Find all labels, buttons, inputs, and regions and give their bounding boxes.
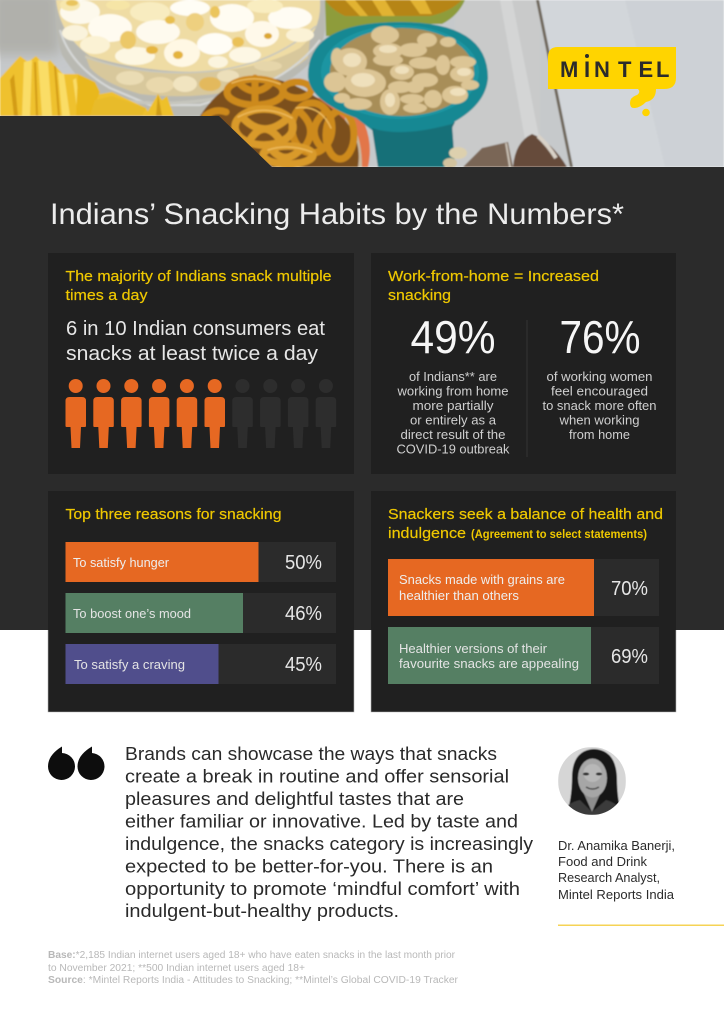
footnote: base and source: [48, 950, 459, 986]
title: Indians’ Snacking Habits by the Numbers*: [50, 198, 624, 231]
heading: work-from-home: snacking: [388, 287, 451, 304]
stat: 76%: to snack more often: [542, 399, 657, 413]
quote text: pleasures and delightful tastes that are: [125, 788, 464, 809]
bar: craving 45%: 45%: [285, 654, 322, 676]
icon: quotation marks: [48, 746, 104, 780]
quote text: either familiar or innovative. Led by taste and: [125, 810, 518, 832]
stat: 49%: working from home: [396, 384, 509, 398]
stat: 76%: when working: [558, 414, 640, 428]
accent line: [558, 924, 724, 926]
bar: hunger 50%: To satisfy hunger: [73, 556, 169, 570]
statement: 6 in 10: snacks at least twice a day: [66, 342, 319, 365]
heading: majority snack multiple times: The majority of Indians snack multiple: [66, 268, 332, 285]
bar: hunger 50%: 50%: [285, 552, 322, 574]
panel: snacking frequency: [48, 253, 354, 474]
heading: work-from-home: Work-from-home = Increased: [388, 268, 599, 285]
bar: craving 45%: To satisfy a craving: [74, 658, 185, 672]
logo: Mintel speech blob: [548, 47, 676, 116]
footnote: base and source: to November 2021; **500 Indian internet users aged 18+: [48, 963, 305, 974]
chips: [0, 56, 150, 116]
stat: 76%: of working women: [546, 370, 653, 384]
footnote: base and source: Source: *Mintel Reports India - Attitudes to Snacking; **Mintel’s Global COVID-19 Tracker: [48, 975, 459, 986]
quote text: expected to be better-for-you. There is an: [125, 856, 493, 876]
stat: 49%: 49%: [410, 311, 496, 363]
bar: mood 46%: 46%: [285, 603, 322, 625]
stat: 49%: [396, 311, 510, 456]
quote text: indulgent-but-healthy products.: [125, 900, 399, 921]
attribution: Food and Drink: [558, 854, 647, 869]
attribution: [558, 838, 675, 902]
logo: Mintel speech blob: MINTEL: [560, 57, 669, 82]
statement: 6 in 10: 6 in 10 Indian consumers eat: [66, 317, 325, 340]
stat: 49%: COVID-19 outbreak: [396, 442, 510, 456]
stat: 76%: [542, 311, 657, 442]
quote text: [125, 743, 534, 921]
heading: balance of health and indulgence: Snackers seek a balance of health and: [388, 506, 663, 523]
quote text: create a break in routine and offer sensorial: [125, 766, 509, 786]
stat: 76%: from home: [569, 428, 630, 442]
divider: [526, 320, 528, 457]
quote text: indulgence, the snacks category is increasingly: [125, 833, 534, 854]
stat: 76%: 76%: [560, 311, 640, 363]
green bowl: [325, 0, 465, 36]
bar: grains 70%: healthier than others: [399, 589, 519, 603]
bar: hunger 50%: [66, 542, 336, 582]
stat: 49%: or entirely as a: [410, 414, 496, 428]
portrait: Dr. Anamika Banerji: [558, 747, 626, 815]
quote text: Brands can showcase the ways that snacks: [125, 743, 497, 764]
heading: work-from-home: [388, 268, 599, 304]
bar: healthier versions 69%: 69%: [611, 646, 648, 668]
banner photo: bowls of snacks on a wooden table: [0, 0, 724, 168]
bar: craving 45%: [66, 644, 336, 684]
bar: mood 46%: [66, 593, 336, 633]
dark background band: [0, 116, 724, 630]
glass popcorn bowl: [55, 0, 325, 116]
bar: healthier versions 69%: [388, 627, 659, 684]
stat: 76%: feel encouraged: [551, 384, 648, 398]
bar: grains 70%: Snacks made with grains are: [399, 573, 565, 587]
statement: 6 in 10: [66, 317, 325, 365]
attribution: Dr. Anamika Banerji,: [558, 838, 675, 853]
bar: mood 46%: To boost one’s mood: [73, 607, 191, 621]
quote text: opportunity to promote ‘mindful comfort’ with: [125, 878, 520, 899]
bar: grains 70%: [388, 559, 659, 616]
bar: healthier versions 69%: favourite snacks are appealing: [399, 657, 579, 671]
attribution: Mintel Reports India: [558, 887, 675, 902]
panel: health and indulgence: [371, 491, 676, 712]
heading: majority snack multiple times: [66, 268, 332, 304]
stat: 49%: direct result of the: [400, 428, 506, 442]
heading: balance of health and indulgence: (Agreement to select statements): [471, 529, 647, 541]
footnote: base and source: Base:*2,185 Indian internet users aged 18+ who have eaten snacks in the last month prior: [48, 950, 456, 961]
orange bowl and pretzels: [316, 97, 371, 167]
panel: work from home: [371, 253, 676, 474]
teal bowl and peanuts: [450, 121, 456, 128]
pictogram: 6 of 10 people highlighted: [66, 379, 336, 448]
stat: 49%: more partially: [412, 399, 494, 413]
attribution: Research Analyst,: [558, 870, 660, 885]
heading: balance of health and indulgence: indulgence: [388, 525, 466, 542]
heading: majority snack multiple times: times a day: [66, 287, 148, 304]
chocolate and nuts on table: [463, 142, 513, 167]
panel: top three reasons: [48, 491, 354, 712]
stat: 49%: of Indians** are: [409, 370, 497, 384]
bar: grains 70%: 70%: [611, 578, 648, 600]
heading: balance of health and indulgence: [388, 506, 663, 542]
heading: top three reasons: Top three reasons for snacking: [66, 506, 282, 523]
bar: healthier versions 69%: Healthier versions of their: [399, 642, 547, 656]
